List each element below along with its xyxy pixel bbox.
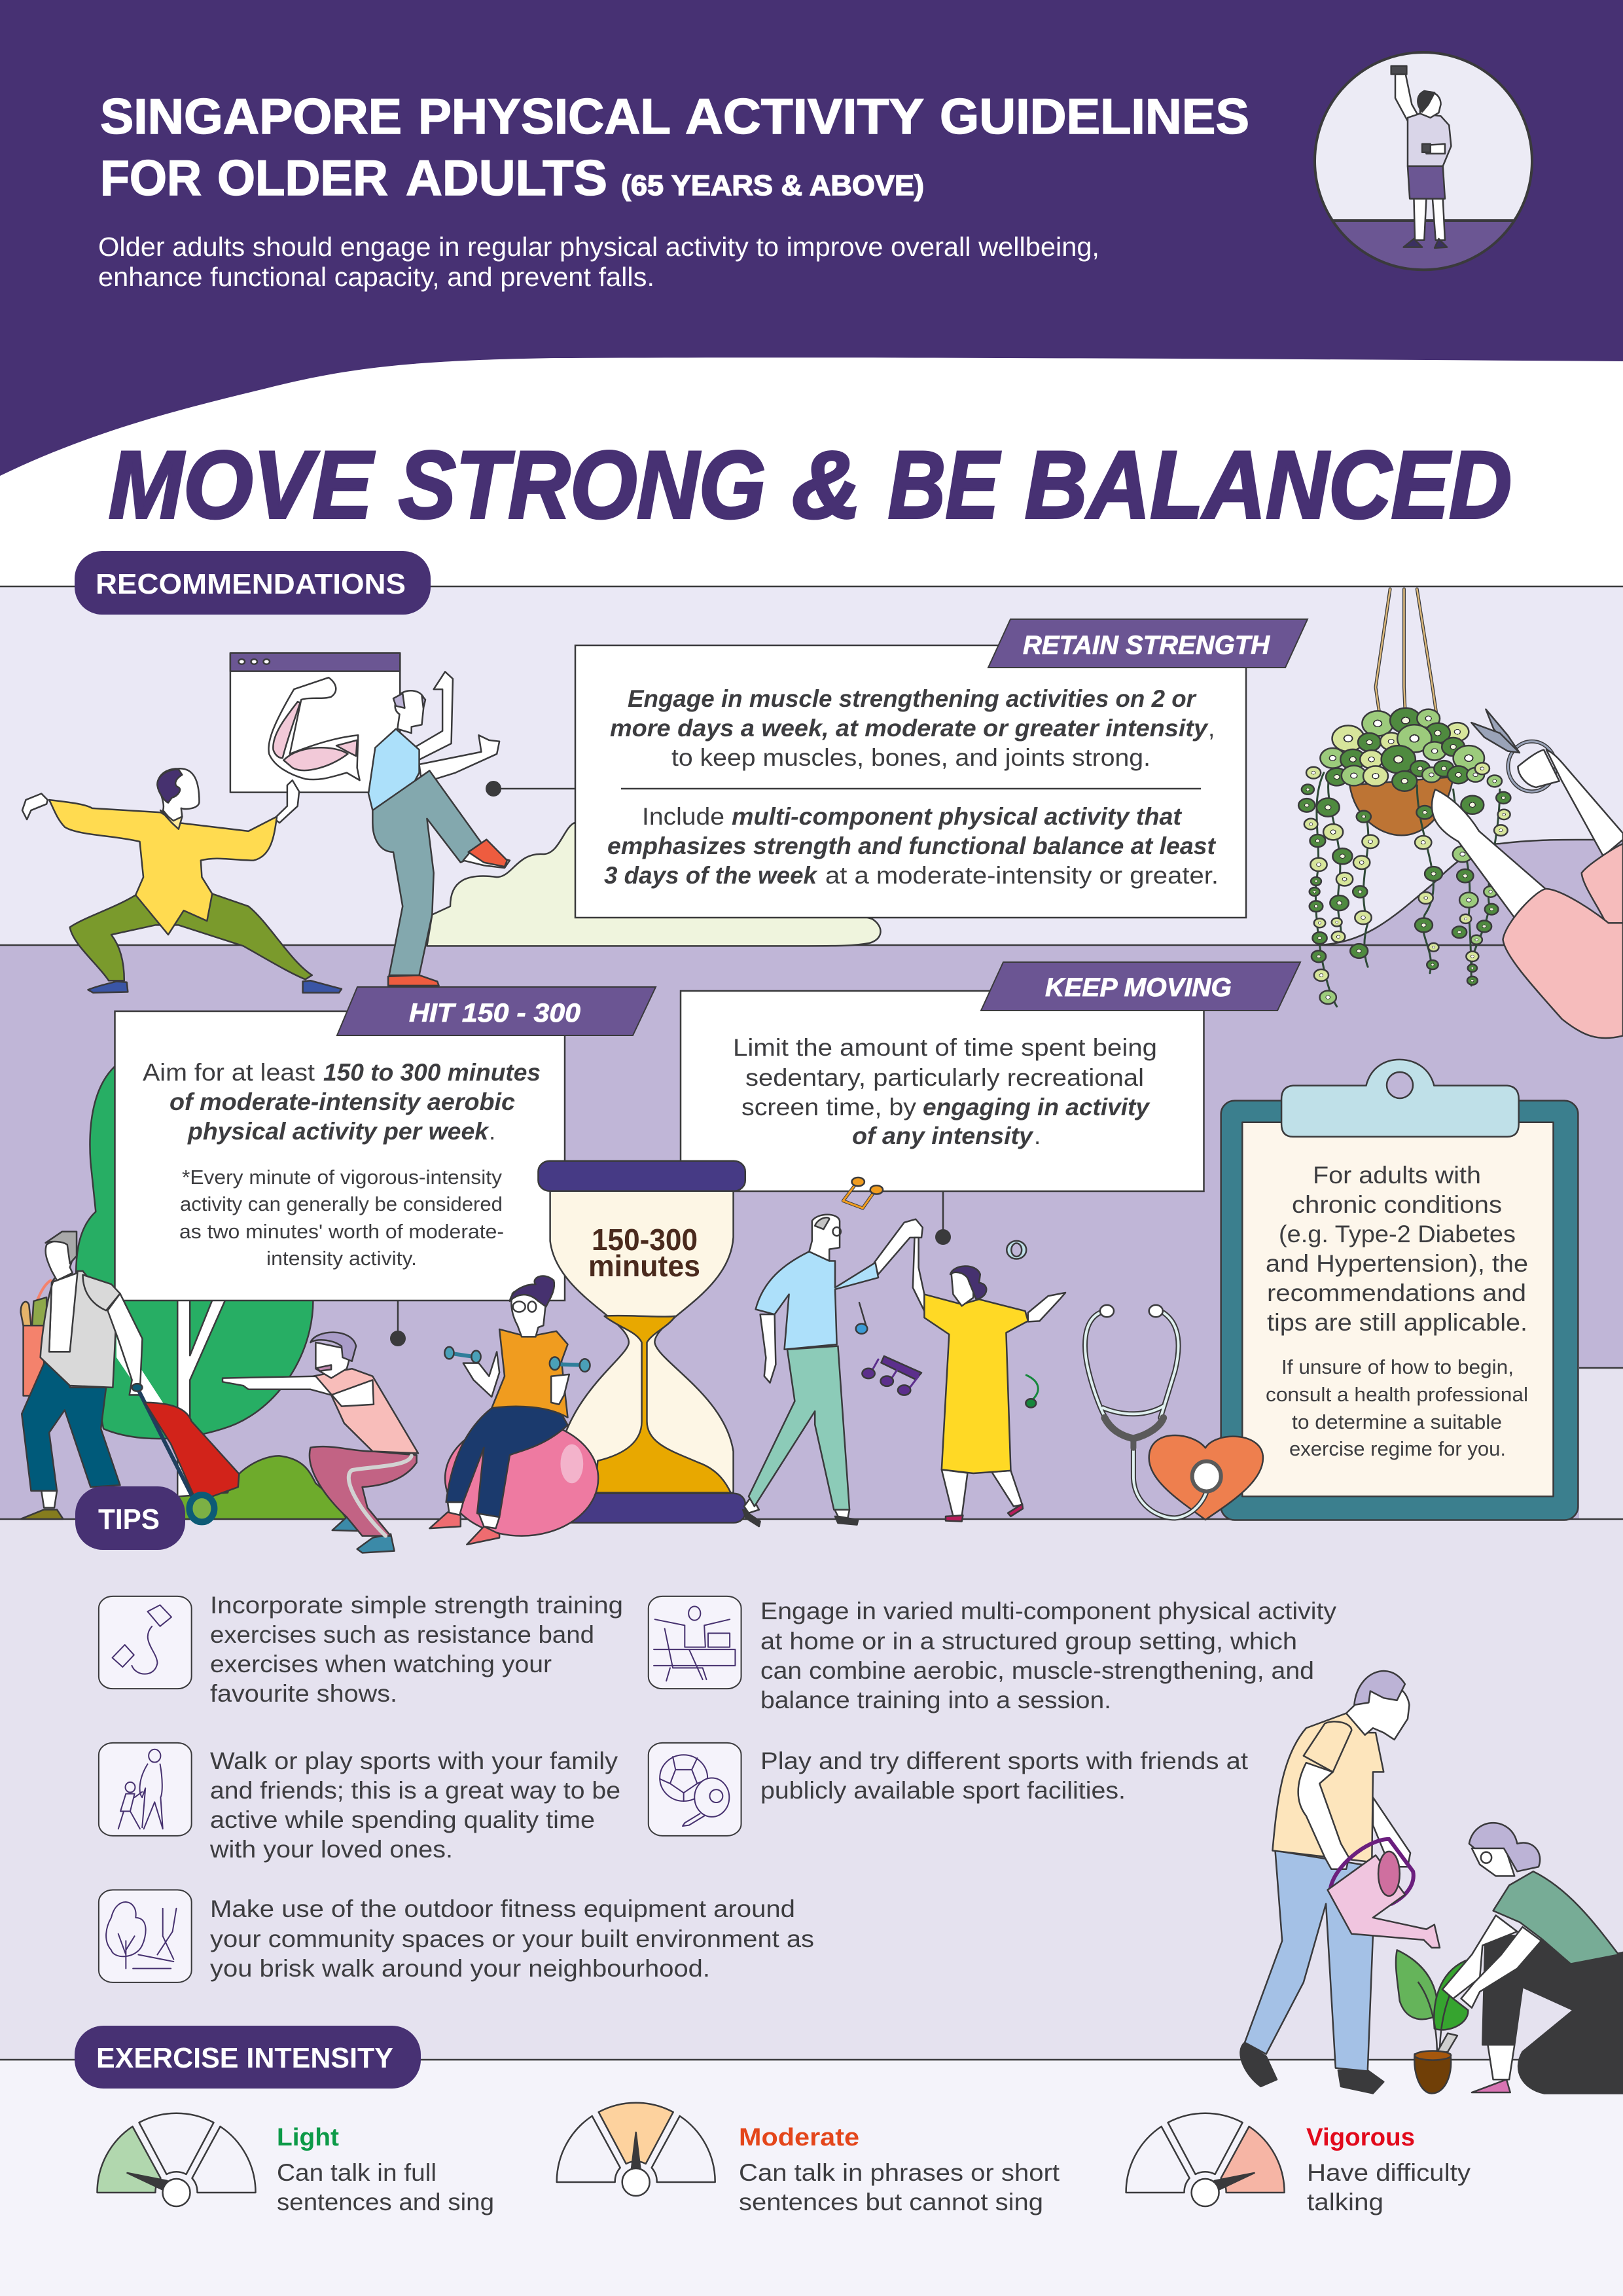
gardening woman — [1442, 1823, 1623, 2093]
panel: keep moving — [681, 962, 1300, 1245]
plant pot — [1349, 777, 1454, 835]
clipboard text: exercise regime for you. — [1289, 1437, 1506, 1460]
vigorous text: Vigorous — [1306, 2124, 1415, 2151]
potted plant — [1396, 1950, 1469, 2093]
tip 3 text — [210, 1895, 814, 1982]
moderate text: Moderate — [739, 2124, 859, 2151]
stethoscope and heart — [1085, 1305, 1263, 1520]
vigorous text: Have difficulty — [1307, 2159, 1471, 2186]
retain strength tag — [988, 619, 1308, 668]
hourglass label: minutes — [588, 1249, 700, 1283]
figure: gardening couple — [1240, 1671, 1623, 2093]
hit connector — [390, 1300, 406, 1346]
clipboard clip — [1281, 1060, 1519, 1137]
hourglass label: 150-300 — [592, 1223, 698, 1257]
header subtitle: enhance functional capacity, and prevent falls. — [98, 262, 654, 292]
hit text: physical activity per week — [187, 1118, 490, 1145]
tip 5 text: publicly available sport facilities. — [760, 1777, 1126, 1804]
tip 2 text — [209, 1748, 620, 1863]
panel: exercise intensity — [97, 2103, 1471, 2215]
light text — [277, 2124, 494, 2215]
hit text — [143, 1059, 541, 1270]
panel: retain strength — [486, 619, 1308, 918]
tip 4 text: can combine aerobic, muscle-strengthening, and — [760, 1657, 1314, 1684]
retain strength text: multi-component physical activity that — [732, 803, 1183, 830]
tips pill — [75, 1486, 185, 1550]
tip 3: outdoor fitness — [99, 1890, 814, 1982]
tip 4 text: balance training into a session. — [760, 1687, 1111, 1713]
clipboard text: For adults with — [1313, 1162, 1481, 1189]
header title: ADULTS — [406, 151, 607, 206]
keep moving tag: KEEP MOVING — [1045, 973, 1232, 1002]
light text: Can talk in full — [277, 2159, 437, 2186]
dancing man — [743, 1215, 923, 1526]
tip 2 text: with your loved ones. — [209, 1836, 453, 1863]
hit text: intensity activity. — [266, 1247, 417, 1270]
hit box — [115, 1011, 565, 1300]
clipboard text: chronic conditions — [1292, 1191, 1502, 1218]
recommendations pill: RECOMMENDATIONS — [96, 568, 406, 600]
intensity: light — [97, 2113, 494, 2215]
keep moving text: screen time, by — [741, 1094, 917, 1121]
tip 3 text: Make use of the outdoor fitness equipment around — [210, 1895, 795, 1922]
icon: man lifting dumbbell in circle — [1315, 52, 1532, 270]
figure: dancing couple — [743, 1177, 1065, 1526]
tip 4 text — [760, 1598, 1337, 1713]
keep moving text: sedentary, particularly recreational — [745, 1064, 1144, 1091]
keep moving text: engaging in activity — [923, 1094, 1150, 1121]
hourglass — [538, 1161, 745, 1523]
retain strength text — [604, 685, 1219, 889]
header title: SINGAPORE — [100, 89, 402, 145]
grocery bag — [21, 1280, 50, 1396]
light text: Light — [277, 2124, 339, 2151]
header title: PHYSICAL — [418, 89, 671, 145]
hit tag: HIT 150 - 300 — [409, 999, 580, 1028]
stethoscope tubes — [1085, 1313, 1207, 1518]
exercise intensity pill — [75, 2026, 421, 2089]
clipboard clip hole — [1387, 1072, 1413, 1098]
header title: OLDER — [217, 151, 388, 206]
header title: GUIDELINES — [940, 89, 1249, 145]
header title: ACTIVITY — [685, 89, 924, 145]
hit text: . — [489, 1118, 495, 1145]
clipboard paper — [1242, 1122, 1554, 1496]
tip 5 text — [760, 1748, 1249, 1804]
gauge: moderate — [557, 2103, 715, 2196]
clipboard text: If unsure of how to begin, — [1281, 1355, 1514, 1378]
music notes — [843, 1177, 1038, 1408]
panel: hit 150-300 — [115, 987, 656, 1346]
figure: man balancing on one leg — [368, 672, 510, 986]
retain strength tag: RETAIN STRENGTH — [1023, 631, 1270, 660]
header title: FOR — [100, 151, 202, 206]
figure: tai chi man — [22, 768, 342, 993]
dancing woman — [913, 1238, 1065, 1521]
retain strength box — [575, 645, 1246, 918]
hourglass sand — [595, 1316, 731, 1493]
tip 4 text: at home or in a structured group setting, which — [760, 1628, 1297, 1655]
tip 1 text: favourite shows. — [210, 1680, 397, 1707]
retain strength text: to keep muscles, bones, and joints strong. — [671, 744, 1150, 771]
hit tag — [337, 987, 656, 1035]
hit text: of moderate-intensity aerobic — [169, 1088, 515, 1115]
keep moving tag — [981, 962, 1300, 1011]
tip 2: family walk — [99, 1743, 620, 1863]
retain strength connector — [486, 781, 575, 797]
header subtitle — [98, 232, 1099, 292]
header panel — [0, 0, 1623, 476]
retain strength text: at a moderate-intensity or greater. — [825, 862, 1219, 889]
stethoscope chest piece — [1192, 1462, 1221, 1492]
tip 2 text: active while spending quality time — [210, 1806, 595, 1833]
tip 5: sports — [649, 1743, 1249, 1836]
moderate text: sentences but cannot sing — [739, 2189, 1043, 2215]
header title: (65 YEARS & ABOVE) — [621, 170, 924, 202]
hit text: as two minutes' worth of moderate- — [179, 1220, 504, 1243]
poster: arm muscle — [230, 653, 400, 793]
tips pill: TIPS — [98, 1503, 160, 1535]
retain strength text: emphasizes strength and functional balance at least — [607, 833, 1217, 859]
icon: tree and fitness equipment — [99, 1890, 192, 1982]
keep moving text — [733, 1034, 1157, 1149]
exercise intensity pill: EXERCISE INTENSITY — [96, 2042, 393, 2074]
tip 2 text: Walk or play sports with your family — [210, 1748, 618, 1774]
moderate text — [739, 2124, 1060, 2215]
intensity: vigorous — [1126, 2113, 1471, 2215]
plant vines — [1315, 773, 1500, 1007]
header title — [100, 89, 1249, 206]
gauge: vigorous — [1126, 2113, 1285, 2206]
header subtitle: Older adults should engage in regular physical activity to improve overall wellbeing, — [98, 232, 1099, 262]
clipboard panel — [1221, 1060, 1578, 1520]
hanging plant — [1298, 589, 1510, 1007]
gardening man — [1240, 1671, 1410, 2093]
vigorous text — [1306, 2124, 1471, 2215]
moderate text: Can talk in phrases or short — [739, 2159, 1060, 2186]
exercise ball — [445, 1421, 598, 1536]
keep moving box — [681, 991, 1204, 1191]
figure: man with shopping bag and trolley — [21, 1232, 239, 1522]
tip 4 text: Engage in varied multi-component physical activity — [760, 1598, 1337, 1624]
main title: BE — [888, 431, 1001, 538]
hourglass label — [588, 1223, 700, 1283]
main title: MOVE — [109, 431, 375, 538]
tip 1 text — [210, 1592, 623, 1707]
hit text: *Every minute of vigorous-intensity — [182, 1166, 503, 1189]
tip 2 text: and friends; this is a great way to be — [210, 1777, 620, 1804]
clipboard text: to determine a suitable — [1292, 1410, 1502, 1433]
tip 5 text: Play and try different sports with friends at — [760, 1748, 1249, 1774]
clipboard text — [1266, 1162, 1528, 1460]
header wave background — [0, 0, 1623, 476]
keep moving text: Limit the amount of time spent being — [733, 1034, 1157, 1061]
retain strength text: , — [1208, 715, 1215, 742]
tip 1: resistance band — [99, 1592, 623, 1707]
intensity: moderate — [557, 2103, 1060, 2215]
tip 3 text: you brisk walk around your neighbourhood. — [210, 1955, 710, 1982]
clipboard text: (e.g. Type-2 Diabetes — [1279, 1221, 1516, 1247]
tip 1 text: exercises when watching your — [210, 1651, 552, 1677]
figure: hands trimming with scissors — [1432, 709, 1623, 1038]
plant leaves — [1298, 708, 1510, 1004]
tip 1 text: Incorporate simple strength training — [210, 1592, 623, 1619]
vigorous text: talking — [1307, 2189, 1383, 2215]
heart — [1149, 1435, 1263, 1520]
retain strength text: more days a week, at moderate or greater intensity — [610, 715, 1209, 742]
clipboard board — [1221, 1101, 1578, 1520]
figure: woman on exercise ball — [429, 1276, 598, 1545]
gauge: light — [97, 2113, 256, 2206]
clipboard text: consult a health professional — [1266, 1383, 1528, 1406]
hit text: activity can generally be considered — [180, 1193, 503, 1215]
clipboard text: tips are still applicable. — [1267, 1309, 1527, 1336]
hill behind hanging plant — [1319, 840, 1623, 945]
tip 4: multi-component activity — [649, 1596, 1337, 1713]
tip 1 text: exercises such as resistance band — [210, 1621, 594, 1648]
keep moving text: of any intensity — [852, 1122, 1034, 1149]
light text: sentences and sing — [277, 2189, 494, 2215]
plant ropes — [1376, 589, 1438, 723]
retain strength text: Engage in muscle strengthening activities on 2 or — [628, 685, 1198, 712]
keep moving text: . — [1034, 1122, 1041, 1149]
pale green bush — [427, 823, 880, 946]
hit text: 150 to 300 minutes — [323, 1059, 541, 1086]
hourglass caps — [538, 1161, 745, 1523]
icon: seated exercise at home — [649, 1596, 741, 1689]
figure: man squatting — [223, 1333, 418, 1552]
retain strength text: 3 days of the week — [604, 862, 818, 889]
main title: BALANCED — [1025, 431, 1512, 538]
icon: adult and child walking — [99, 1743, 192, 1836]
watering can — [1328, 1839, 1440, 1948]
hourglass glass — [550, 1191, 734, 1493]
icon: resistance band — [99, 1596, 192, 1689]
clipboard text: recommendations and — [1267, 1280, 1526, 1306]
bright green bush — [179, 1456, 347, 1519]
clipboard text: and Hypertension), the — [1266, 1250, 1528, 1277]
retain strength text: Include — [642, 803, 724, 830]
hit text: Aim for at least — [143, 1059, 315, 1086]
stethoscope ear tips — [1100, 1305, 1163, 1317]
panel: tips — [99, 1592, 1337, 1982]
main title: STRONG — [399, 431, 766, 538]
icon: scissors — [1471, 709, 1556, 791]
dumbbells — [444, 1347, 590, 1372]
main title: & — [792, 431, 861, 538]
main title — [109, 431, 1512, 538]
icon: ball and paddle — [649, 1743, 741, 1836]
tip 3 text: your community spaces or your built environment as — [210, 1926, 814, 1952]
recommendations pill — [75, 551, 431, 615]
shopping trolley — [132, 1384, 239, 1522]
keep moving connector — [935, 1191, 951, 1245]
tree — [76, 1066, 313, 1519]
